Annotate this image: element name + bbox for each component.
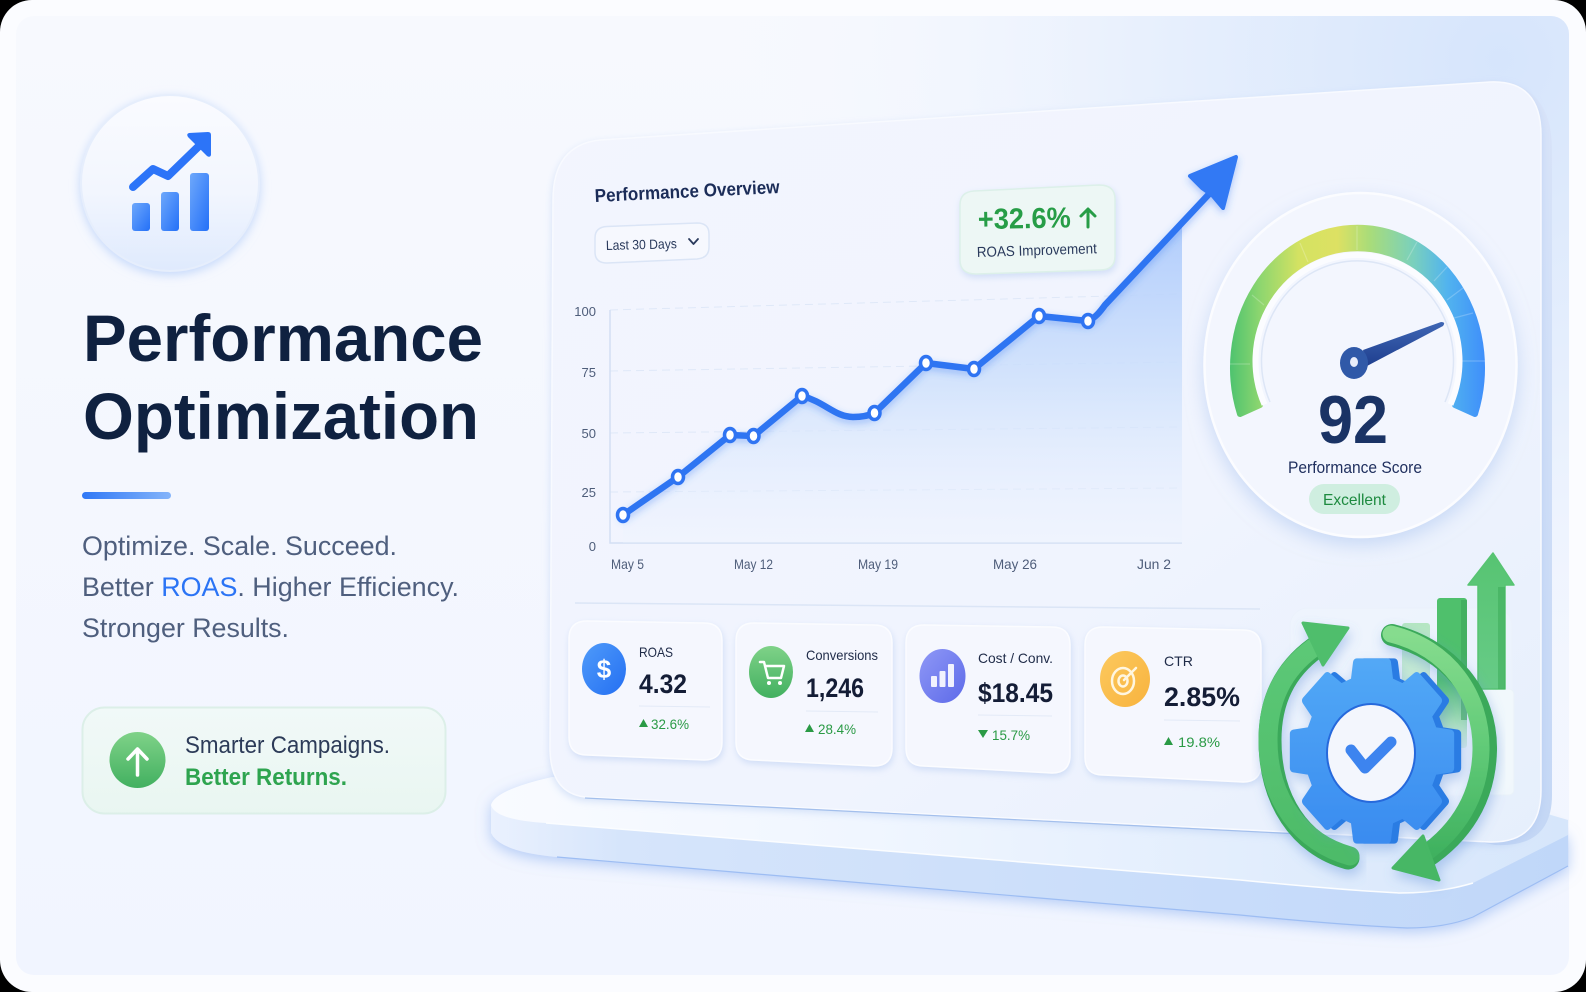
card: cost per conversion [906,625,1070,773]
icon: green arrow [1468,553,1514,689]
change up: 32.6% [651,716,689,732]
change up: 19.8% [1178,734,1220,750]
icon: gear with check [1294,663,1457,839]
x axis labels [611,556,1171,572]
card: cost per conversion: $18.45 [978,678,1053,708]
axes [610,310,1182,543]
icon: right circular arrow [1391,634,1486,880]
data points [618,310,1094,522]
y axis labels: 25 [582,485,596,500]
tagline text: Better ROAS. Higher Efficiency. [82,572,459,602]
score value: 92 [1318,382,1388,458]
card: CTR [1085,627,1261,782]
y axis labels: 0 [589,539,596,554]
grid lines [610,294,1182,492]
callout: ROAS improvement badge: ROAS Improvement [977,241,1097,261]
card: ROAS: 4.32 [639,669,687,699]
icon: target [1100,651,1150,707]
status pill: Excellent [1323,492,1387,509]
card: CTR: 2.85% [1164,682,1240,712]
date dropdown: Last 30 Days [606,236,677,253]
card: ROAS [569,621,722,760]
icon: dollar: $ [597,654,612,684]
tagline text: Optimize. Scale. Succeed. [82,531,397,561]
gauge arc [1233,228,1482,414]
tagline text: Stronger Results. [82,613,289,643]
icon: up arrow [110,732,166,788]
x axis labels: Jun 2 [1137,556,1171,572]
change down: 15.7% [992,727,1030,743]
card: conversions: 1,246 [806,673,864,703]
x axis labels: May 19 [858,556,898,572]
y axis labels: 50 [582,426,596,441]
accent rule [82,492,171,499]
panel side edge [1480,80,1552,845]
title: Optimization [83,379,479,453]
panel: left column headline area [81,95,483,814]
x axis labels: May 12 [734,556,773,572]
panel face [550,82,1541,842]
callout: ROAS improvement badge: +32.6% [978,202,1071,236]
callout: ROAS improvement badge [960,185,1115,274]
callout: smarter campaigns: Smarter Campaigns. [185,732,390,759]
y axis labels: 75 [582,365,596,380]
icon: green growth bars [1290,553,1514,795]
status pill [1309,484,1400,514]
card: conversions: Conversions [806,647,878,663]
chart: ROAS line chart [574,157,1236,572]
area fill [623,224,1182,543]
panel: dashboard [550,80,1552,845]
platform base [491,777,1568,928]
gauge: performance score [1204,193,1516,537]
icon: dollar [582,643,626,695]
card: conversions [736,623,892,766]
tagline text [82,531,459,643]
icon: up arrow [1081,209,1095,227]
date dropdown [595,223,709,263]
icon: cart [749,646,793,698]
trend line with arrow [623,157,1236,515]
icon: refresh arrows and gear [1268,623,1486,880]
x axis labels: May 5 [611,556,644,572]
card: ROAS: ROAS [639,644,673,660]
y axis labels [574,304,596,554]
gauge needle [1340,322,1444,379]
card: cost per conversion: Cost / Conv. [978,650,1053,666]
score label: Performance Score [1288,458,1422,477]
title: Performance [83,301,483,375]
icon: left circular arrow [1268,623,1350,858]
y axis labels: 100 [574,304,596,319]
card: CTR: CTR [1164,653,1193,669]
change up: 28.4% [818,721,856,737]
icon: bars [920,649,966,703]
heading: performance overview: Performance Overview [594,176,781,206]
callout: smarter campaigns: Better Returns. [185,764,347,791]
callout: smarter campaigns [82,708,446,814]
x axis labels: May 26 [993,556,1037,572]
icon: growth chart in circle [81,95,259,271]
